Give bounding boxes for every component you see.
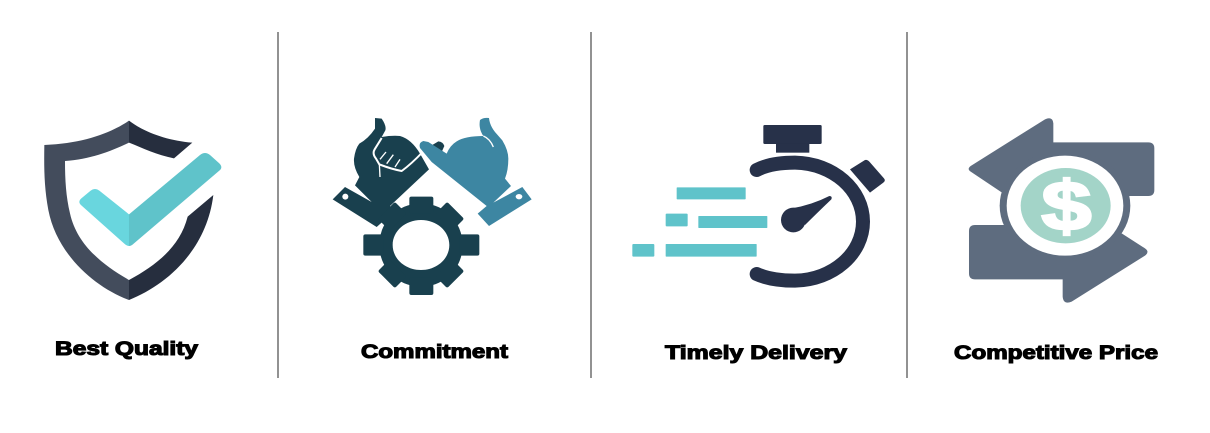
label: Timely Delivery: Timely Delivery [665,343,848,364]
label: Commitment: Commitment [361,342,509,363]
icon part: gear [363,197,479,295]
icon part: dark hand [333,118,429,227]
label: Best Quality: Best Quality [55,339,199,360]
icon: shield with check mark [44,121,221,300]
icon: stopwatch with speed lines [632,125,885,281]
icon: price arrows with dollar coin [969,118,1154,303]
label: Competitive Price: Competitive Price [954,343,1158,364]
icon part: light hand [420,118,532,226]
icon: price arrows with dollar coin: $ [1041,168,1092,246]
icon: two hands and gear [333,118,532,295]
